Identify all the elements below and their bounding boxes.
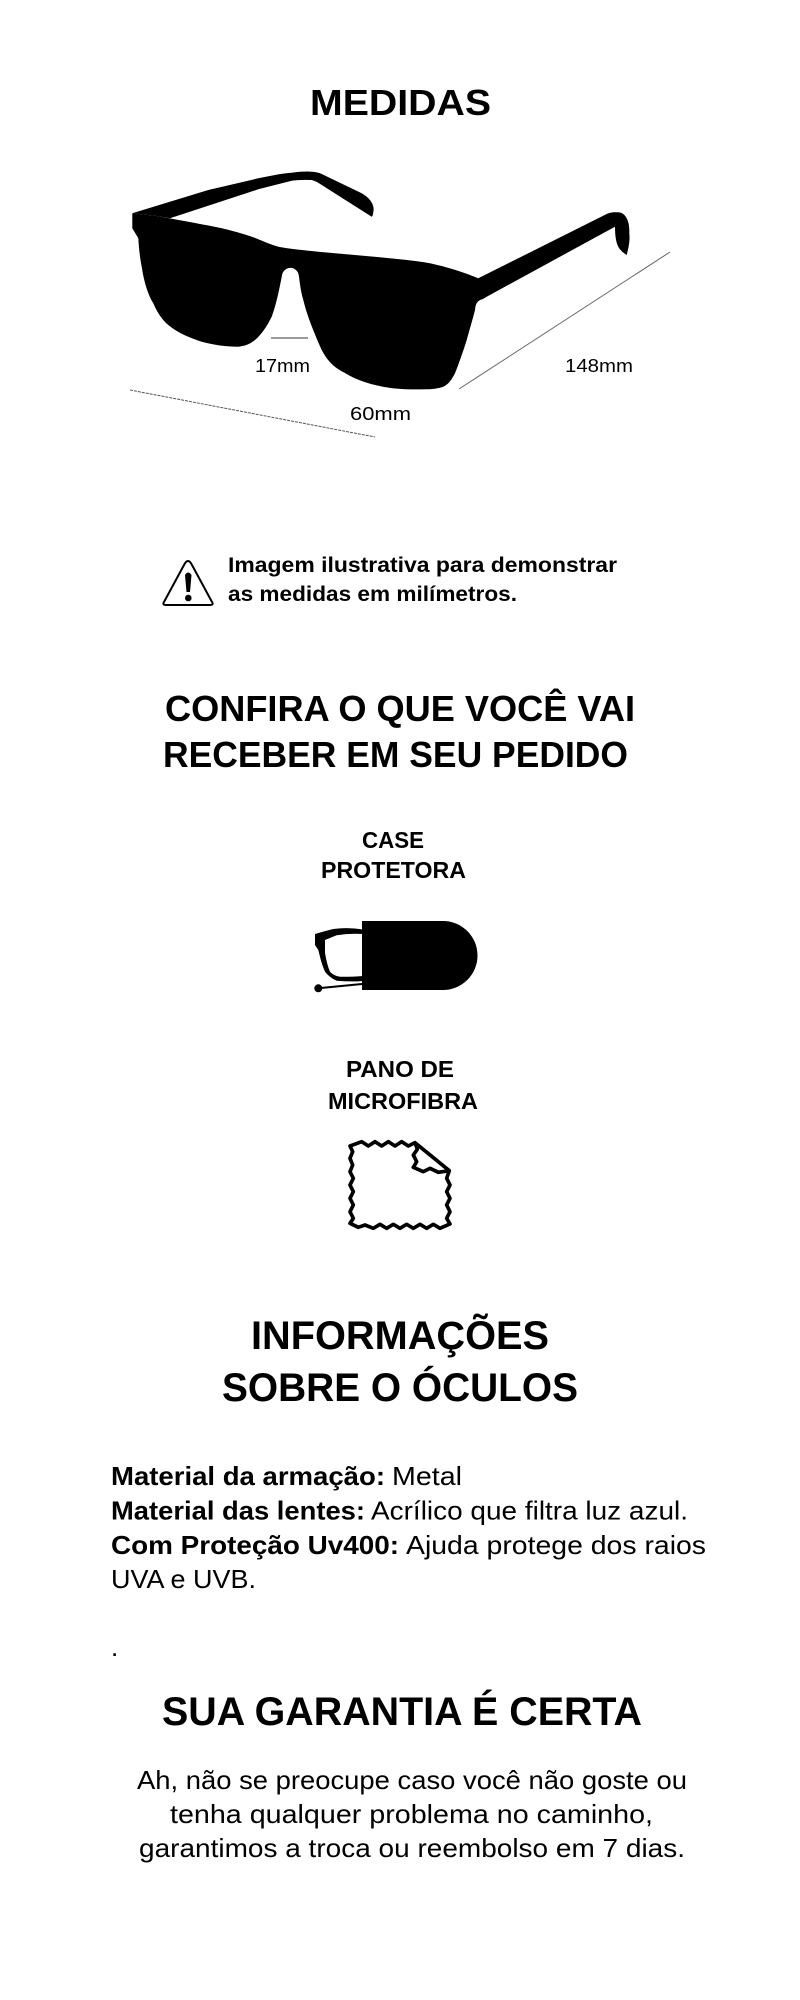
notice text: as medidas em milímetros.	[228, 583, 517, 606]
icon: warning triangle	[163, 561, 213, 605]
icon: glasses case	[314, 921, 478, 992]
text block: guarantee: garantimos a troca ou reembolso em 7 dias.	[139, 1833, 685, 1863]
sunglasses silhouette with measurements	[130, 171, 670, 437]
item heading: case protetora	[321, 827, 466, 883]
text block: guarantee: Ah, não se preocupe caso você não goste ou	[137, 1765, 687, 1795]
notice text: Imagem ilustrativa para demonstrar	[228, 554, 617, 577]
heading: confira: RECEBER EM SEU PEDIDO	[163, 734, 628, 775]
item heading: case protetora: CASE	[362, 827, 424, 853]
heading: confira: CONFIRA O QUE VOCÊ VAI	[165, 687, 635, 729]
heading: informacoes sobre o oculos: INFORMAÇÕES	[251, 1312, 549, 1358]
icon: sunglasses	[132, 171, 630, 389]
item heading: case protetora: PROTETORA	[321, 857, 466, 883]
measure line: lens width	[130, 390, 375, 437]
text block: product details: Com Proteção Uv400:	[111, 1530, 399, 1560]
text block: product details: Material da armação:	[111, 1461, 385, 1491]
item heading: pano de microfibra	[328, 1056, 478, 1114]
text block: guarantee: tenha qualquer problema no caminho,	[170, 1799, 653, 1829]
text block: product details: Ajuda protege dos raios	[406, 1530, 706, 1560]
item heading: pano de microfibra: PANO DE	[346, 1056, 454, 1082]
text block: product details: Metal	[392, 1461, 462, 1491]
title: medidas: MEDIDAS	[310, 82, 491, 123]
heading: informacoes sobre o oculos: SOBRE O ÓCULOS	[222, 1364, 578, 1410]
label: 60mm: 60mm	[350, 404, 411, 424]
stray period: .	[111, 1632, 118, 1662]
text block: product details: Acrílico que filtra luz azul.	[371, 1496, 688, 1526]
text block: product details	[111, 1461, 706, 1594]
item heading: pano de microfibra: MICROFIBRA	[328, 1088, 478, 1114]
notice text	[228, 554, 617, 606]
measure line: bridge	[271, 337, 308, 339]
icon: microfibre cloth	[350, 1142, 450, 1228]
heading: confira	[163, 687, 635, 775]
heading: sua garantia e certa: SUA GARANTIA É CERTA	[162, 1689, 642, 1734]
notice: illustrative image	[163, 554, 617, 606]
label: 148mm: 148mm	[565, 356, 633, 376]
measure line: temple	[459, 252, 670, 389]
text block: guarantee	[137, 1765, 687, 1863]
label: 17mm: 17mm	[255, 356, 310, 376]
heading: informacoes sobre o oculos	[222, 1312, 578, 1410]
text block: product details: Material das lentes:	[111, 1496, 365, 1526]
text block: product details: UVA e UVB.	[111, 1564, 256, 1594]
